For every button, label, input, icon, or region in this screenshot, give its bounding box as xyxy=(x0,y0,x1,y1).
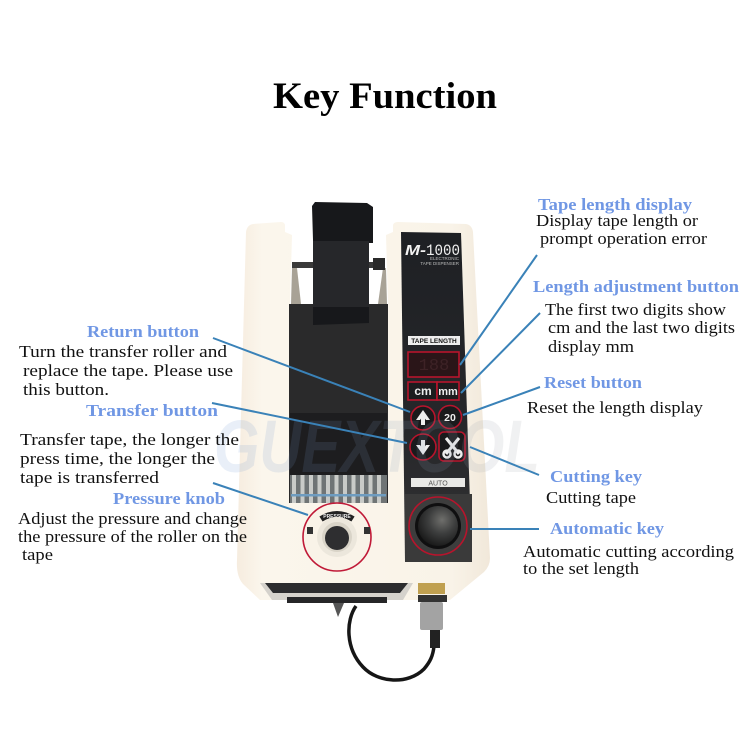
tape length display xyxy=(408,352,459,377)
callout: cutting key xyxy=(546,467,643,507)
roller axle xyxy=(292,262,384,268)
model logo: ELECTRONIC xyxy=(430,256,460,261)
callout: transfer button: press time, the longer the xyxy=(20,449,215,468)
support struts xyxy=(291,268,301,304)
callout: length adjustment button: The first two digits show xyxy=(545,300,727,319)
callout: pressure knob xyxy=(18,489,247,564)
callout: tape length display: Display tape length or xyxy=(536,211,698,230)
title: Key Function xyxy=(273,76,497,117)
callout: transfer button xyxy=(20,401,239,487)
callout: transfer button: Transfer tape, the longer the xyxy=(20,430,239,449)
tape length label xyxy=(408,336,460,345)
machine body xyxy=(237,222,490,600)
reset button xyxy=(438,406,462,428)
callout: return button: replace the tape. Please use xyxy=(23,361,233,380)
model logo: M- xyxy=(405,242,426,259)
model logo xyxy=(405,242,460,266)
pressure knob: PRESSURE xyxy=(323,514,351,520)
cutting key xyxy=(439,432,465,461)
automatic key xyxy=(405,494,472,562)
tape roll xyxy=(312,202,373,325)
callout: cutting key: Cutting key xyxy=(550,467,643,486)
callout: tape length display: Tape length display xyxy=(538,195,693,214)
callout: pressure knob: Adjust the pressure and change xyxy=(18,509,247,528)
return button xyxy=(411,406,435,430)
leader lines xyxy=(212,255,540,529)
model logo: TAPE DISPENSER xyxy=(420,261,460,266)
reset button: 20 xyxy=(444,412,456,424)
illustration: M-1000 electronic tape dispenser xyxy=(237,202,490,680)
tape length display: 188 xyxy=(419,357,449,376)
callout: pressure knob: Pressure knob xyxy=(113,489,225,508)
callout: return button: this button. xyxy=(23,380,109,399)
pressure knob xyxy=(303,503,371,571)
watermark: GUEXTOOL xyxy=(214,405,540,488)
callout: reset button: Reset the length display xyxy=(527,398,704,417)
callout: automatic key: to the set length xyxy=(523,559,640,578)
callout: automatic key: Automatic cutting according xyxy=(523,542,735,561)
comb teeth xyxy=(290,475,387,503)
auto label xyxy=(411,478,465,488)
bottom cutter slot xyxy=(260,583,413,617)
auto label: AUTO xyxy=(428,480,448,488)
cm and mm buttons xyxy=(408,382,459,400)
tape length label: TAPE LENGTH xyxy=(411,338,457,345)
tape tray xyxy=(289,304,388,503)
callout: pressure knob: tape xyxy=(22,545,53,564)
callout: length adjustment button: Length adjustment button xyxy=(533,277,740,296)
control panel xyxy=(401,232,472,562)
callout: length adjustment button: display mm xyxy=(548,337,634,356)
callout: transfer button: Transfer button xyxy=(86,401,219,420)
callout: pressure knob: the pressure of the roller on the xyxy=(18,527,247,546)
callout: length adjustment button xyxy=(533,277,740,356)
callout: cutting key: Cutting tape xyxy=(546,488,636,507)
callout: automatic key xyxy=(523,519,735,578)
callout: reset button xyxy=(527,373,704,417)
callout: automatic key: Automatic key xyxy=(550,519,665,538)
callout: return button: Turn the transfer roller and xyxy=(19,342,228,361)
model logo: 1000 xyxy=(426,242,460,260)
cm and mm buttons: cm xyxy=(414,384,432,398)
callout: return button: Return button xyxy=(87,322,200,341)
transfer button xyxy=(410,434,436,460)
callout: length adjustment button: cm and the last two digits xyxy=(548,318,735,337)
cm and mm buttons: mm xyxy=(438,386,458,398)
callout: reset button: Reset button xyxy=(544,373,643,392)
callout: tape length display: prompt operation error xyxy=(540,229,707,248)
callout: transfer button: tape is transferred xyxy=(20,468,160,487)
cable and connector xyxy=(349,583,447,680)
callout: return button xyxy=(19,322,233,399)
callout: tape length display xyxy=(536,195,707,248)
